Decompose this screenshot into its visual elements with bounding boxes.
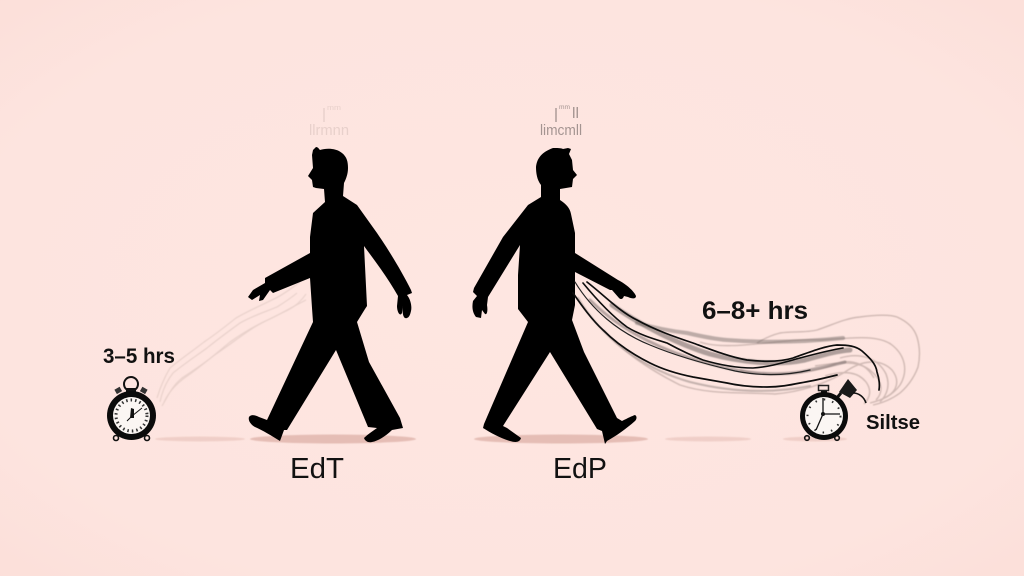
label: Siltse: Siltse [866,412,920,434]
faint label above right figure: I [554,105,558,127]
strand band: soft grey [578,298,850,391]
strand: lower black [573,293,837,387]
faint label above right figure: limcmll [540,122,582,139]
label: EdP: EdP [553,453,607,485]
label: EdT: EdT [290,453,344,485]
faint label above right figure: mm [559,105,570,111]
figure: left walker silhouette [248,147,412,442]
faint label above left figure [309,105,349,139]
strand: second lower [575,282,810,375]
trail: dark strands behind right figure [573,282,879,391]
faint label above right figure: ll [572,105,579,122]
strand: upper black [587,282,879,390]
faint trail: left figure [157,282,306,406]
figure: right walker silhouette [472,148,636,444]
ground shadows [155,434,847,444]
trail: grey wisps behind right figure [604,315,919,405]
faint label above right figure [540,105,582,139]
duration label: 3-5 hrs: 3–5 hrs [103,345,175,368]
faint label above left figure: mm [327,105,341,112]
duration label: 6-8+ hrs: 6–8+ hrs [702,297,808,325]
strand: middle black [583,283,843,368]
faint label above left figure: llrmnn [309,122,349,139]
icon: left alarm clock [107,377,156,440]
icon: right alarm clock [800,379,866,440]
faint label above left figure: I [322,105,326,127]
